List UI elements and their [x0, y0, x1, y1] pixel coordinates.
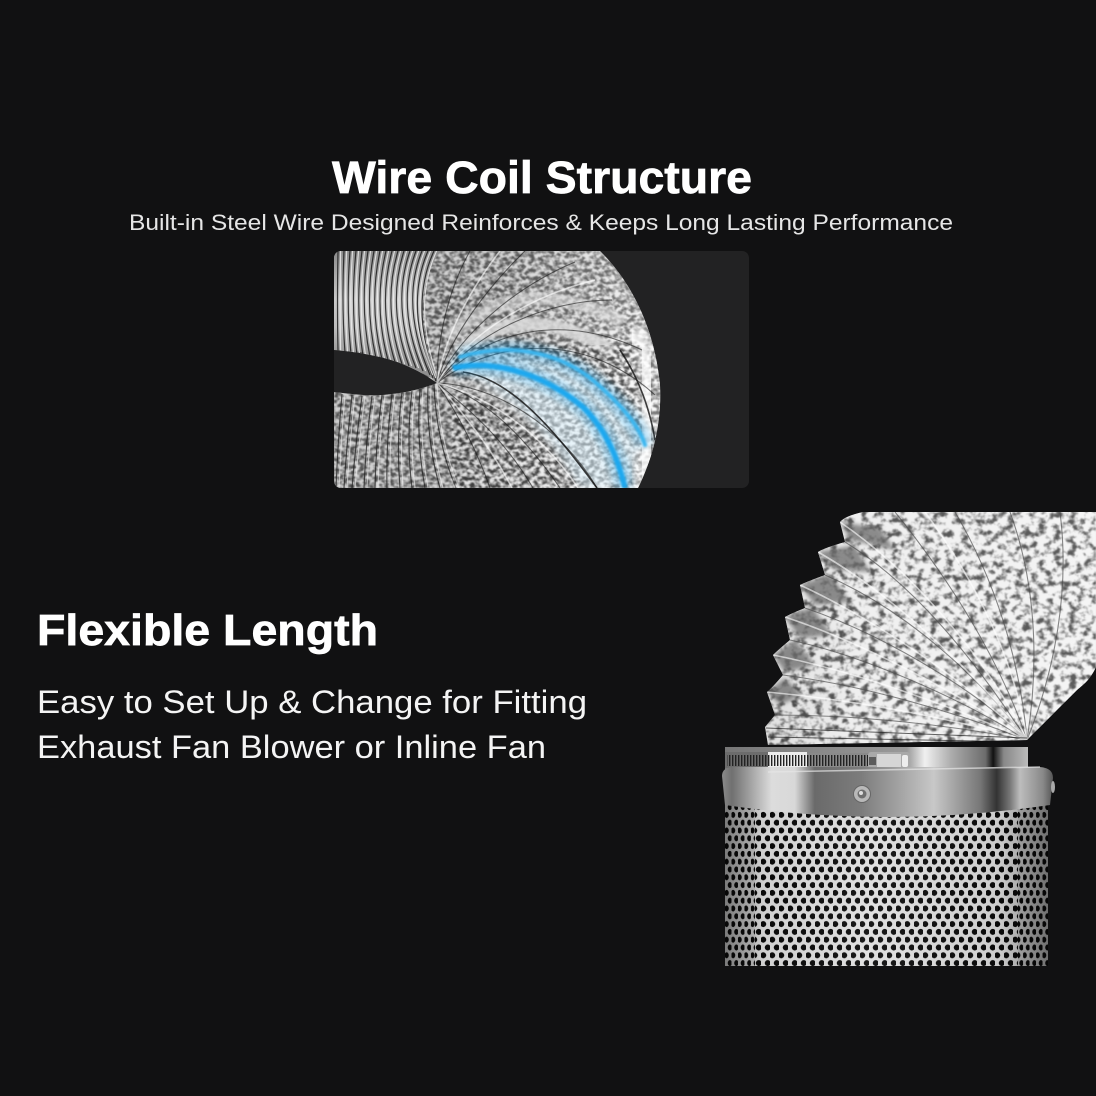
- side screw: [1051, 781, 1055, 793]
- ring screw: [854, 786, 870, 802]
- illustration: bent foil duct with blue wire highlight: [334, 251, 664, 488]
- blue wire highlight outer: [460, 350, 645, 445]
- body line 1: Easy to Set Up & Change for Fitting: [37, 684, 587, 720]
- subtitle: Built-in Steel Wire Designed Reinforces & Keeps Long Lasting Performance: [129, 210, 953, 235]
- upper metal ring: [725, 747, 1028, 770]
- ring top highlight: [768, 767, 1040, 772]
- panel: wire coil photo: [334, 251, 749, 488]
- illustration: duct attached to carbon filter: [722, 510, 1096, 966]
- carbon filter mesh body: [725, 805, 1048, 966]
- panel background: [334, 251, 749, 488]
- body line 2: Exhaust Fan Blower or Inline Fan: [37, 729, 546, 765]
- body text: [37, 684, 587, 765]
- foil duct: [760, 510, 1096, 750]
- blue wire highlight inner: [453, 365, 625, 488]
- hose clamp: [725, 752, 910, 773]
- title: Wire Coil Structure: Wire Coil Structure: [332, 152, 752, 203]
- heading: Flexible Length: Flexible Length: [37, 606, 378, 655]
- infographic canvas: [40, 160, 1096, 966]
- lower metal ring: [722, 767, 1053, 817]
